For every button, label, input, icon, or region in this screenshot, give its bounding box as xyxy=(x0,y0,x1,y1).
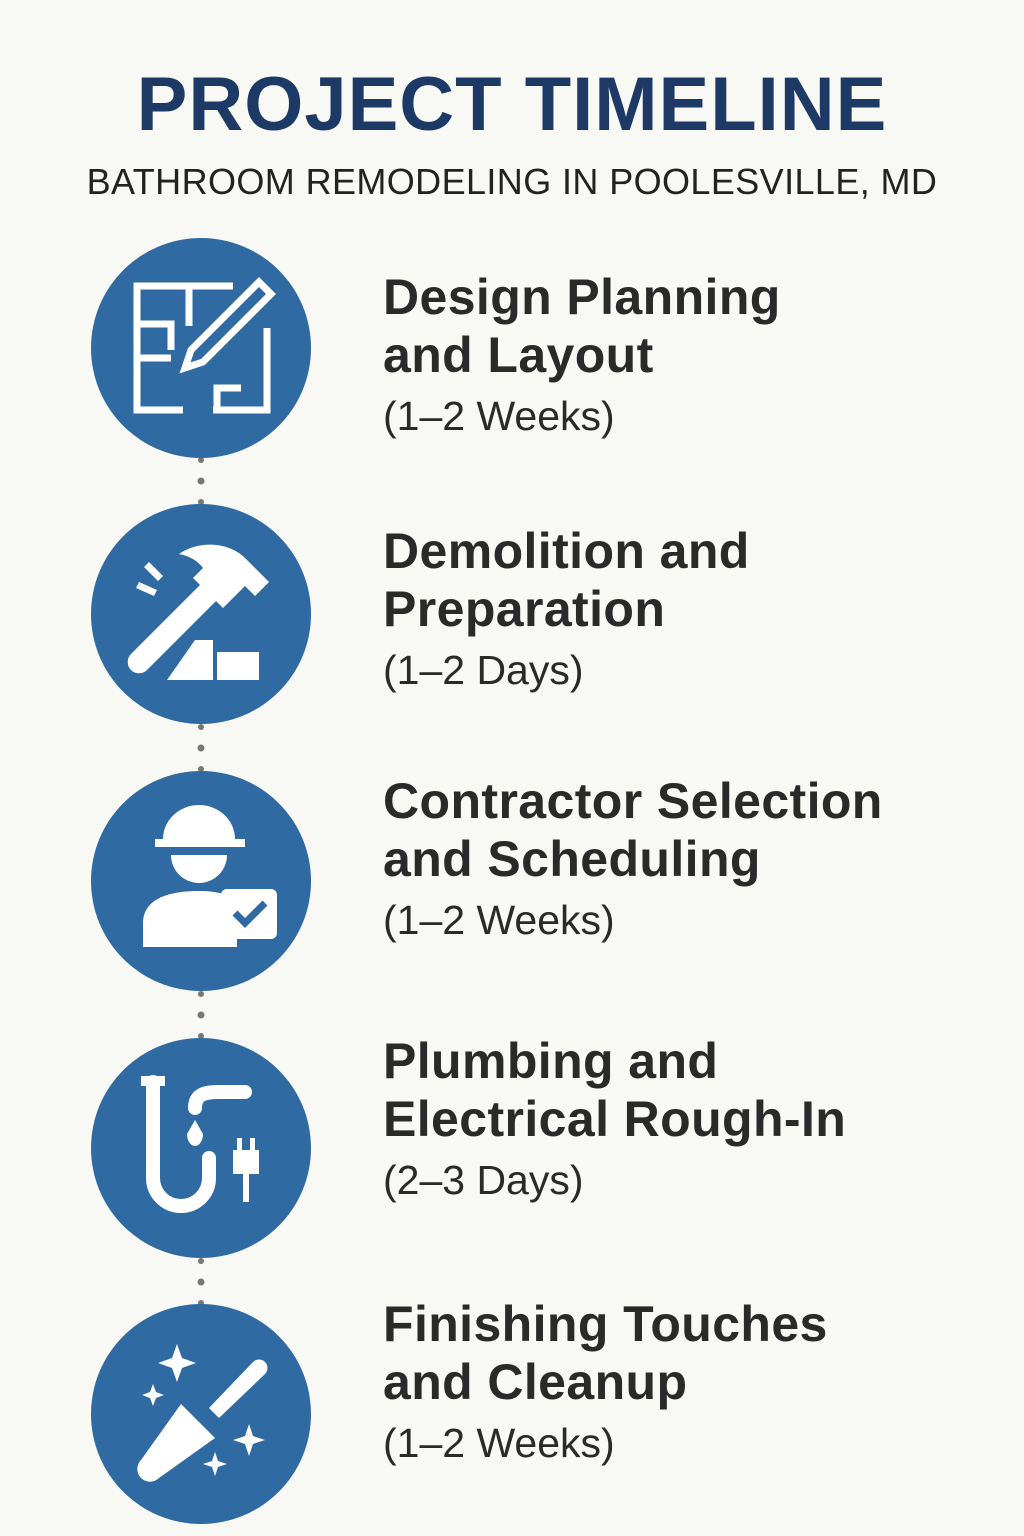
title: PROJECT TIMELINE xyxy=(137,62,887,147)
step 3 text: and Scheduling xyxy=(383,831,761,887)
step 5 text: and Cleanup xyxy=(383,1354,687,1410)
step 4 text: Electrical Rough-In xyxy=(383,1091,846,1147)
icon: hammer xyxy=(91,504,311,724)
icon: floor plan xyxy=(91,238,311,458)
step 2 text xyxy=(383,523,750,693)
step 2 text: Preparation xyxy=(383,581,665,637)
step 4 text xyxy=(383,1033,846,1203)
step 5 text: (1–2 Weeks) xyxy=(383,1420,615,1466)
step 1 text xyxy=(383,269,781,439)
subtitle: BATHROOM REMODELING IN POOLESVILLE, MD xyxy=(87,161,937,202)
icon: contractor xyxy=(91,771,311,991)
step 2 text: (1–2 Days) xyxy=(383,647,584,693)
step 3 text: (1–2 Weeks) xyxy=(383,897,615,943)
step 4 text: (2–3 Days) xyxy=(383,1157,584,1203)
step 1 text: Design Planning xyxy=(383,269,781,325)
step 2 text: Demolition and xyxy=(383,523,750,579)
step 3 text xyxy=(383,773,883,943)
step 5 text: Finishing Touches xyxy=(383,1296,828,1352)
step 5 text xyxy=(383,1296,828,1466)
icon: plumbing xyxy=(91,1038,311,1258)
step 3 text: Contractor Selection xyxy=(383,773,883,829)
icon: trowel sparkles xyxy=(91,1304,311,1524)
step 4 text: Plumbing and xyxy=(383,1033,718,1089)
step 1 text: (1–2 Weeks) xyxy=(383,393,615,439)
step 1 text: and Layout xyxy=(383,327,654,383)
